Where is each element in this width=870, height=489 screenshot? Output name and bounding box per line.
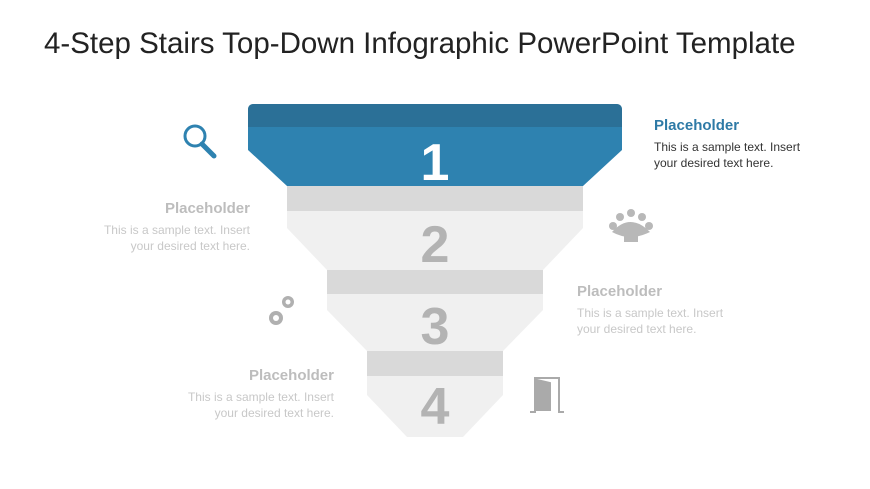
text block 2: Placeholder [165, 200, 250, 217]
text block 2: your desired text here. [131, 239, 250, 253]
step 4 [367, 351, 503, 437]
text block 4: This is a sample text. Insert [188, 390, 334, 404]
step 3: 3 [421, 298, 449, 356]
icon: meeting table [609, 209, 653, 242]
text block 3: your desired text here. [577, 322, 696, 336]
icon: magnifier [185, 126, 214, 156]
text block 1 [654, 117, 800, 170]
step 1 [248, 104, 622, 192]
text block 3: Placeholder [577, 283, 662, 300]
icon: gears [269, 296, 294, 325]
text block 2: This is a sample text. Insert [104, 223, 250, 237]
text block 1: your desired text here. [654, 156, 773, 170]
icon: door [530, 378, 564, 412]
text block 1: This is a sample text. Insert [654, 140, 800, 154]
step 4: 4 [421, 378, 450, 436]
step 3 [327, 270, 543, 356]
text block 3: This is a sample text. Insert [577, 306, 723, 320]
step 1: 1 [421, 134, 449, 192]
text block 4 [188, 367, 334, 420]
title: 4-Step Stairs Top-Down Infographic PowerPoint Template [44, 27, 796, 60]
step 2: 2 [421, 216, 449, 274]
text block 4: your desired text here. [215, 406, 334, 420]
text block 2 [104, 200, 250, 253]
text block 4: Placeholder [249, 367, 334, 384]
text block 1: Placeholder [654, 117, 739, 134]
step 2 [287, 186, 583, 274]
text block 3 [577, 283, 723, 336]
